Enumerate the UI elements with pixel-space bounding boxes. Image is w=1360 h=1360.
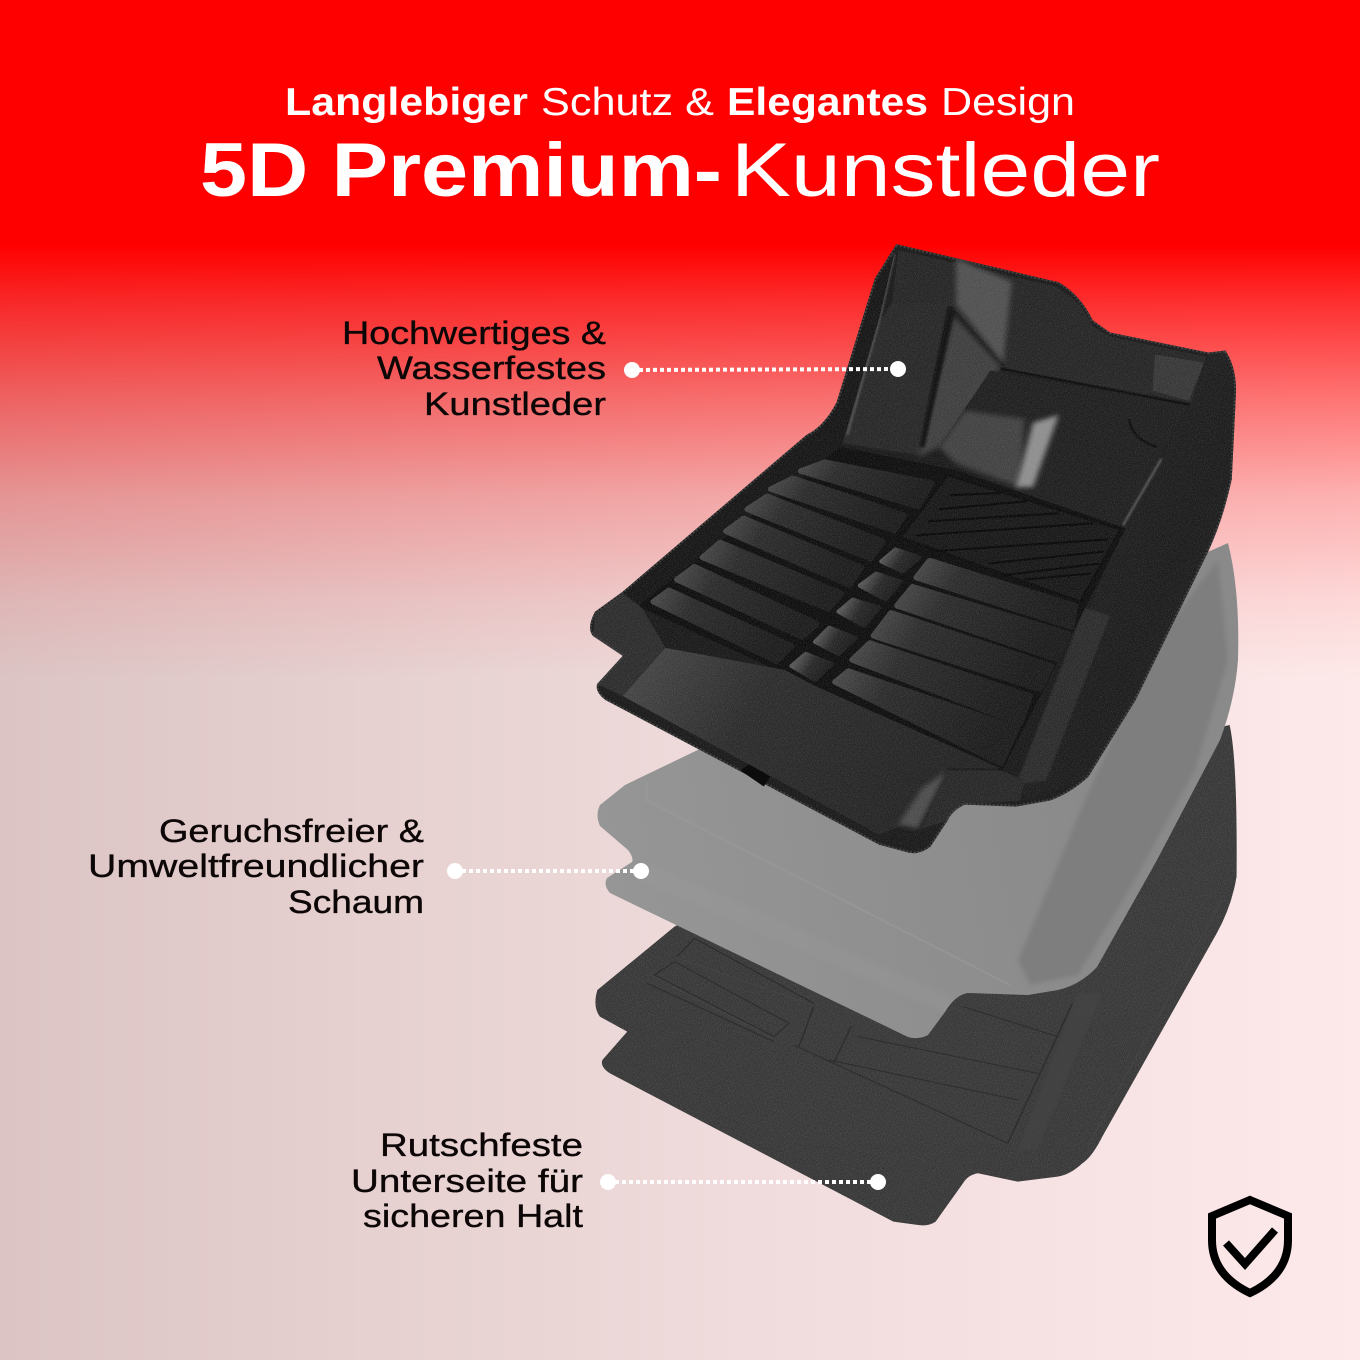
strap clip: [740, 764, 770, 786]
lower left fold: [593, 594, 665, 696]
foam darker side wall: [1018, 560, 1228, 985]
callout 2 label: Schaum: [288, 884, 424, 920]
right wall: [1089, 350, 1236, 776]
callout 3 label: sicheren Halt: [363, 1198, 583, 1234]
icon: shield with check: [1212, 1200, 1288, 1293]
callout 2 label: Umweltfreundlicher: [88, 848, 424, 884]
title line 1: Design: [941, 81, 1075, 124]
footwell highlight: [1016, 415, 1059, 487]
middle layer: foam: [598, 543, 1238, 1038]
left sill: [623, 254, 894, 606]
embossed rib lines: [647, 938, 1072, 1143]
stitched edge: [590, 244, 1236, 853]
footwell: [945, 370, 998, 438]
title line 1: Langlebiger: [285, 81, 528, 124]
callout 2 connector: [447, 863, 649, 879]
title: [200, 81, 1160, 213]
title line 1: Elegantes: [727, 81, 928, 124]
callout 1 label: Kunstleder: [424, 386, 606, 422]
back wall light fold: [956, 258, 1012, 363]
centre blocks: [792, 549, 920, 680]
callout 1 label: [342, 315, 606, 422]
mat outline: [590, 244, 1236, 853]
callout 2 label: Geruchsfreier &: [159, 813, 424, 849]
pedal pocket: [841, 302, 948, 455]
ribs: [654, 462, 1075, 764]
title line 2: 5D Premium-: [200, 128, 722, 213]
title line 1: [285, 81, 1075, 124]
floor tray: [642, 449, 1123, 768]
title line 2: [200, 128, 1160, 213]
callout 3 label: Rutschfeste: [380, 1127, 583, 1163]
callout 1 label: Hochwertiges &: [342, 315, 606, 351]
callout 1: [342, 315, 906, 422]
callout 1 connector: [624, 361, 906, 378]
heel light streak: [898, 770, 948, 829]
rubber pedal pad: [901, 475, 1121, 602]
callout 3 label: Unterseite für: [351, 1163, 583, 1199]
bottom layer: anti-slip underside: [580, 720, 1247, 1230]
callout 3 connector: [600, 1174, 886, 1190]
callout 3 label: [351, 1127, 583, 1234]
callout 2 label: [88, 813, 424, 920]
leather grain: [580, 230, 1250, 860]
grainy side strip: [1018, 993, 1102, 1150]
title line 2: Kunstleder: [731, 128, 1160, 213]
callout 3: [351, 1127, 886, 1234]
top layer: premium faux leather mat: [580, 230, 1250, 860]
back wall: [892, 250, 1206, 403]
heel pad: [623, 648, 1001, 835]
title line 1: Schutz &: [541, 81, 714, 124]
callout 1 label: Wasserfestes: [377, 350, 606, 386]
callout 2: [88, 813, 649, 920]
